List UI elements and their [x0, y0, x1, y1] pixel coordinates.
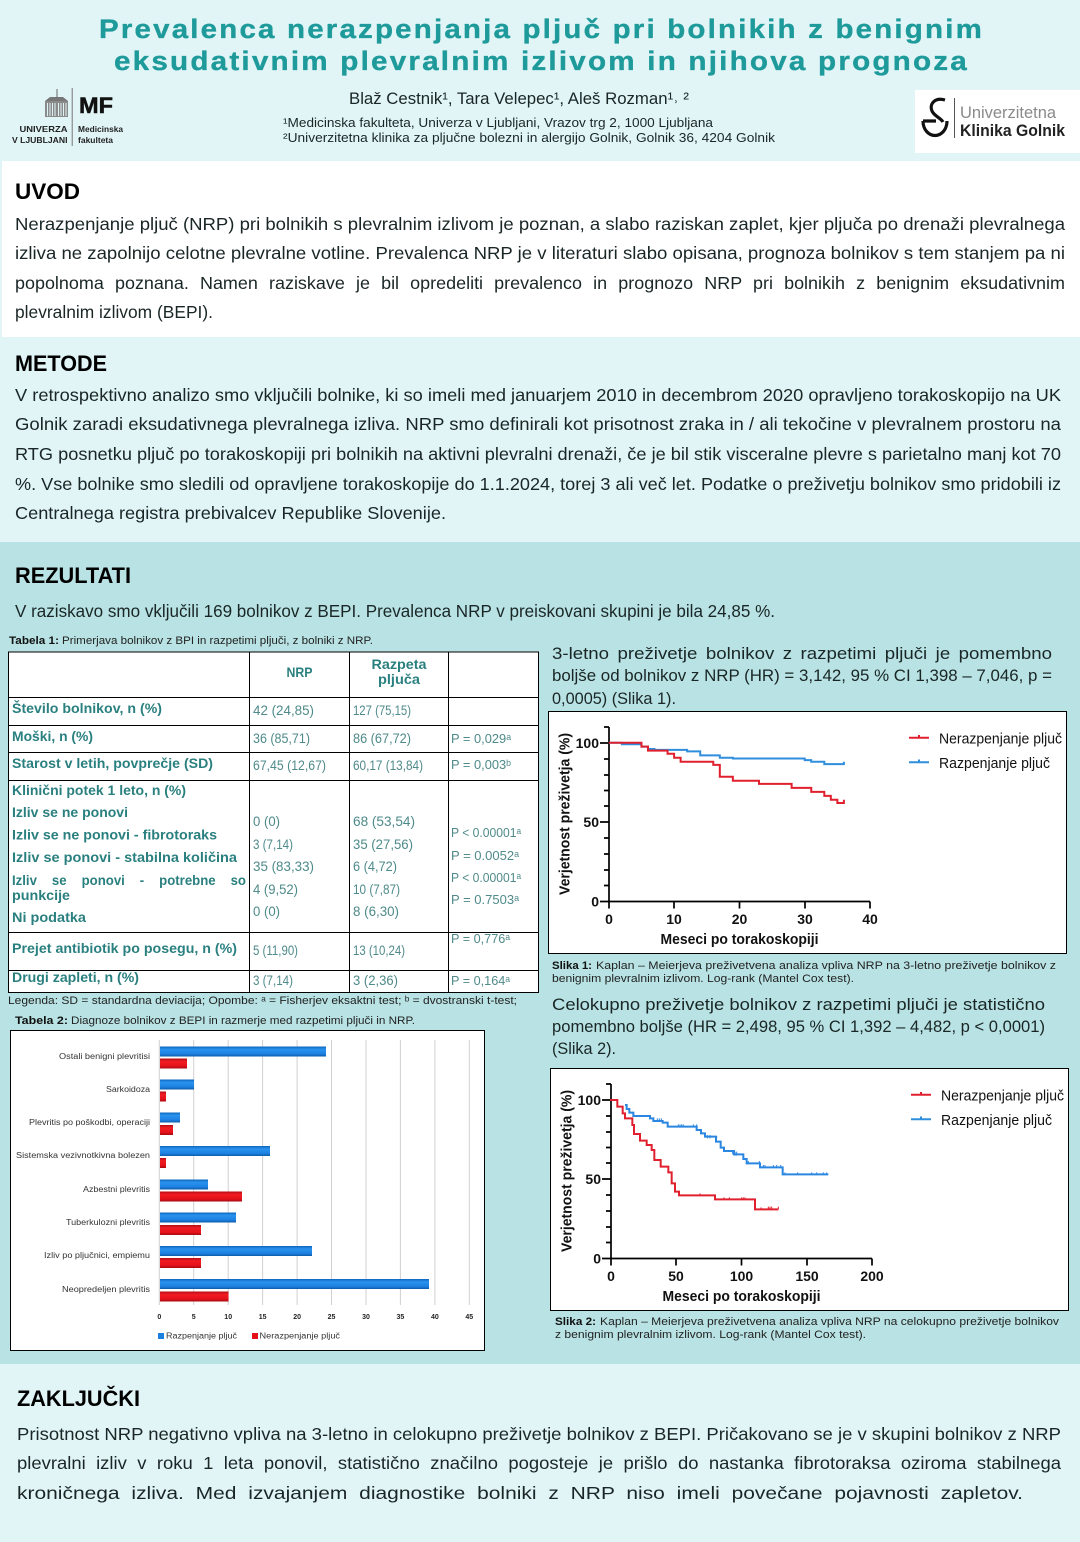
figure 2 caption: Slika 2: [555, 1316, 596, 1328]
figure 2 caption: Kaplan – Meierjeva preživetvena analiza vpliva NRP na celokupno preživetje bolnikov [600, 1316, 1060, 1328]
header band background [0, 0, 1080, 161]
axis numbers: 50 [668, 1268, 684, 1284]
p values: P = 0,029ᵃ [451, 732, 511, 746]
panel: UVOD [2, 161, 1080, 337]
figure 2 caption [555, 1316, 1060, 1341]
category labels: Azbestni plevritis [83, 1185, 150, 1194]
curves [609, 743, 844, 803]
axis numbers: 100 [730, 1268, 753, 1284]
axis numbers: 50 [585, 1171, 601, 1187]
text block: methods: Golnik zaradi eksudativnega plevralnega izliva. NRP smo definirali kot prisotnost zraka in / ali tekočine v plevralnem prostoru na [15, 414, 1061, 434]
logo: University of Ljubljana Faculty of Medicine: MF [79, 93, 113, 118]
razpeta pljuca values: 13 (10,24) [353, 943, 405, 958]
icon: faculty building [45, 89, 68, 117]
NRP values: 0 (0) [253, 904, 280, 919]
heading: REZULTATI: REZULTATI [15, 563, 131, 588]
x axis numbers: 0 [157, 1314, 161, 1321]
axis numbers: 0 [591, 894, 599, 910]
x axis numbers: 30 [362, 1314, 370, 1321]
chart legend: Razpenjanje pljuč [166, 1332, 237, 1340]
razpeta pljuca values: 8 (6,30) [353, 904, 399, 919]
p values: P = 0,776ᵃ [451, 932, 510, 946]
x axis numbers: 40 [431, 1314, 439, 1321]
row labels: Klinični potek 1 leto, n (%) [12, 782, 186, 798]
axis numbers: 100 [578, 1092, 601, 1108]
title [99, 14, 984, 76]
text block: results lead: V raziskavo smo vključili 169 bolnikov z BEPI. Prevalenca NRP v preiskovani skupini je bila 24,85 %. [15, 601, 775, 621]
table header: NRP [286, 664, 312, 680]
x axis numbers: 45 [465, 1314, 473, 1321]
heading: ZAKLJUCKI: ZAKLJUČKI [17, 1386, 140, 1411]
table header: Razpeta [372, 656, 427, 672]
title: Prevalenca nerazpenjanja pljuč pri bolnikih z benignim [99, 14, 984, 44]
x axis numbers [157, 1314, 473, 1321]
text block: methods: RTG posnetku pljuč po torakoskopiji pri bolnikih na aktivni plevralni drenaži, če je bil stik visceralne plevre s parietalno manj kot 70 [15, 444, 1061, 464]
axis numbers: 100 [576, 735, 599, 751]
axis numbers [578, 1092, 884, 1284]
text block: 3-year survival [552, 644, 1052, 708]
row labels: Drugi zapleti, n (%) [12, 969, 139, 985]
razpeta pljuca values: 35 (27,56) [353, 837, 413, 852]
text block: overall survival: Celokupno preživetje bolnikov z razpetimi pljuči je statistično [552, 995, 1045, 1014]
axis numbers [576, 735, 878, 927]
NRP values [253, 703, 326, 988]
p values [451, 732, 521, 988]
axis titles: Verjetnost preživetja (%) [560, 1090, 576, 1252]
chart legend [158, 1332, 340, 1340]
NRP values: 3 (7,14) [253, 973, 293, 988]
category labels: Ostali benigni plevritisi [59, 1052, 150, 1061]
text block: overall survival: (Slika 2). [552, 1039, 616, 1058]
legend: Nerazpenjanje pljuč [939, 730, 1062, 748]
NRP values: 35 (83,33) [253, 859, 314, 874]
row labels: Prejet antibiotik po posegu, n (%) [12, 940, 237, 956]
text block: methods: %. Vse bolnike smo sledili od opravljene torakoskopije do 1.1.2024, torej 3 ali več let. Podatke o preživetju bolnikov smo pridobili iz [15, 474, 1061, 494]
title: eksudativnim plevralnim izlivom in njihova prognoza [114, 46, 969, 76]
table 2 caption: Tabela 2: [15, 1015, 68, 1027]
row labels: Izliv se ne ponovi [12, 804, 128, 820]
razpeta pljuca values: 86 (67,72) [353, 731, 411, 746]
axis titles [558, 733, 818, 948]
text block: introduction [15, 214, 1065, 322]
axis numbers: 0 [607, 1268, 615, 1284]
text block: introduction: popolnoma poznana. Namen raziskave je bil opredeliti prevalenco in prognozo NRP pri bolnikih z benignim eksudativnim [15, 273, 1065, 293]
table header [286, 656, 427, 687]
heading: UVOD: UVOD [15, 179, 80, 204]
panel: METODE [0, 337, 1080, 542]
p values: P < 0.00001ᵃ [451, 826, 521, 840]
text block: methods: V retrospektivno analizo smo vključili bolnike, ki so imeli med januarjem 2010 in decembrom 2020 opravljeno torakoskopijo na UK [15, 385, 1061, 405]
affiliations [283, 115, 776, 145]
p values: P = 0.0052ᵃ [451, 849, 519, 863]
axis numbers: 30 [797, 911, 813, 927]
razpeta pljuca values: 127 (75,15) [353, 703, 411, 718]
logo: University of Ljubljana Faculty of Medicine: Medicinska [78, 125, 124, 134]
NRP values: 0 (0) [253, 814, 280, 829]
axis titles: Verjetnost preživetja (%) [558, 733, 574, 895]
table 1 caption: Primerjava bolnikov z BPI in razpetimi pljuči, z bolniki z NRP. [62, 635, 373, 647]
p values: P = 0,003ᵇ [451, 758, 511, 772]
p values: P = 0,164ᵃ [451, 974, 510, 988]
authors: Blaž Cestnik¹, Tara Velepec¹, Aleš Rozman¹˒ ² [349, 90, 689, 108]
NRP values: 5 (11,90) [253, 943, 298, 958]
row labels: Izliv se ponovi - potrebne so [12, 872, 246, 888]
row labels: Število bolnikov, n (%) [12, 699, 162, 716]
category labels: Sistemska vezivnotkivna bolezen [16, 1151, 150, 1160]
figure 1 caption [552, 960, 1056, 985]
axis numbers: 0 [605, 911, 613, 927]
logo: Univerzitetna Klinika Golnik: Klinika Golnik [960, 122, 1066, 140]
category labels: Izliv po pljučnici, empiemu [44, 1251, 150, 1260]
row labels: Ni podatka [12, 909, 86, 925]
razpeta pljuca values: 60,17 (13,84) [353, 758, 423, 773]
axis numbers: 150 [795, 1268, 819, 1284]
text block: 3-year survival: 0,0005) (Slika 1). [552, 689, 676, 708]
x axis numbers: 25 [328, 1314, 335, 1321]
heading: METODE: METODE [15, 351, 107, 376]
razpeta pljuca values: 3 (2,36) [353, 973, 398, 988]
category labels [16, 1052, 151, 1294]
curves [610, 1100, 828, 1209]
row labels: Starost v letih, povprečje (SD) [12, 755, 213, 771]
razpeta pljuca values: 68 (53,54) [353, 814, 415, 829]
axis titles: Meseci po torakoskopiji [662, 1288, 820, 1305]
x axis numbers: 20 [293, 1314, 301, 1321]
text block: overall survival [552, 995, 1045, 1058]
category labels: Plevritis po poškodbi, operaciji [29, 1118, 150, 1127]
logo: University of Ljubljana Faculty of Medicine: fakulteta [78, 136, 114, 145]
category labels: Sarkoidoza [106, 1085, 151, 1094]
category labels: Tuberkulozni plevritis [66, 1218, 150, 1227]
table header: pljuča [378, 671, 420, 687]
text block: introduction: izliva ne zapolnijo celotne plevralne votline. Prevalenca NRP je v literaturi slabo opisana, prognoza bolnikov s tem stanjem pa ni [15, 243, 1065, 263]
NRP values: 3 (7,14) [253, 837, 293, 852]
axis titles: Meseci po torakoskopiji [660, 931, 818, 948]
axis numbers: 200 [860, 1268, 884, 1284]
text block: conclusions: Prisotnost NRP negativno vpliva na 3-letno in celokupno preživetje bolnikov z BEPI. Pričakovano se je v skupini bolnikov z NRP [17, 1424, 1061, 1444]
axis numbers: 50 [583, 814, 599, 830]
text block: 3-year survival: 3-letno preživetje bolnikov z razpetimi pljuči je pomembno [552, 644, 1052, 663]
text block: 3-year survival: boljše od bolnikov z NRP (HR) = 3,142, 95 % CI 1,398 – 7,046, p = [552, 666, 1052, 685]
x axis numbers: 10 [224, 1314, 232, 1321]
figure 1 caption: Slika 1: [552, 960, 592, 972]
chart: Kaplan-Meier overall survival [550, 1068, 1068, 1310]
x axis numbers: 35 [397, 1314, 404, 1321]
razpeta pljuca values: 6 (4,72) [353, 859, 397, 874]
panel: REZULTATI background [0, 542, 1080, 1364]
figure 1 caption: Kaplan – Meierjeva preživetvena analiza vpliva NRP na 3-letno preživetje bolnikov z [596, 960, 1056, 972]
p values: P < 0.00001ᵃ [451, 871, 521, 885]
text block: overall survival: pomembno boljše (HR = 2,498, 95 % CI 1,392 – 4,482, p < 0,0001) [552, 1017, 1045, 1036]
p values: P = 0.7503ᵃ [451, 893, 519, 907]
affiliations: ²Univerzitetna klinika za pljučne bolezni in alergijo Golnik, Golnik 36, 4204 Golnik [283, 130, 776, 145]
axis numbers: 10 [666, 911, 682, 927]
axes [600, 727, 870, 908]
affiliations: ¹Medicinska fakulteta, Univerza v Ljubljani, Vrazov trg 2, 1000 Ljubljana [283, 115, 714, 130]
text block: introduction: Nerazpenjanje pljuč (NRP) pri bolnikih s plevralnim izlivom je poznan, a slabo raziskan zaplet, kjer pljuča po drenaži plevralnega [15, 214, 1065, 234]
text block: conclusions: kroničnega izliva. Med izvajanjem diagnostike bolniki z NRP niso imeli povečane pojavnosti zapletov. [17, 1483, 1023, 1503]
figure 2 caption: z benignim plevralnim izlivom. Log-rank (Mantel Cox test). [555, 1329, 866, 1341]
legend: Razpenjanje pljuč [941, 1112, 1052, 1129]
logo: Univerzitetna Klinika Golnik: Univerzitetna [960, 103, 1057, 122]
row labels: Izliv se ponovi - stabilna količina [12, 849, 237, 865]
axis numbers: 0 [593, 1250, 601, 1266]
red bars: nerazpenjanje pljuc [160, 1058, 242, 1302]
logo: Univerzitetna Klinika Golnik [915, 90, 1080, 153]
text block: conclusions: plevralni izliv v roku 1 leta ponovil, statistično značilno pogosteje je prišlo do nastanka fibrotoraksa oziroma stabilnega [17, 1453, 1061, 1473]
legend: Razpenjanje pljuč [939, 755, 1050, 772]
NRP values: 36 (85,71) [253, 731, 310, 746]
text block: conclusions [17, 1424, 1061, 1503]
category labels: Neopredeljen plevritis [62, 1285, 150, 1294]
legend [911, 1088, 1064, 1129]
panel: ZAKLJUCKI [0, 1364, 1080, 1542]
logo: University of Ljubljana Faculty of Medicine: UNIVERZA [20, 124, 68, 134]
table legend: Legenda: SD = standardna deviacija; Opombe: ᵃ = Fisherjev eksaktni test; ᵇ = dvostranski t-test; [8, 995, 517, 1007]
blue bars: razpenjanje pljuc [160, 1046, 429, 1289]
razpeta pljuca values [353, 703, 423, 988]
x axis numbers: 15 [259, 1314, 267, 1321]
x axis numbers: 5 [192, 1314, 196, 1321]
NRP values: 67,45 (12,67) [253, 758, 326, 773]
text block: introduction: plevralnim izlivom (BEPI). [15, 302, 213, 322]
NRP values: 42 (24,85) [253, 703, 314, 718]
legend [909, 730, 1062, 772]
axis numbers: 40 [862, 911, 878, 927]
text block: methods [15, 385, 1061, 523]
legend: Nerazpenjanje pljuč [941, 1088, 1064, 1104]
axes [602, 1084, 872, 1266]
logo: University of Ljubljana Faculty of Medicine: V LJUBLJANI [12, 135, 68, 145]
table 1 [8, 652, 539, 992]
bar chart: diagnoses [10, 1030, 484, 1350]
table 1 caption: Tabela 1: [9, 635, 59, 647]
figure 1 caption: benignim plevralnim izlivom. Log-rank (Mantel Cox test). [552, 973, 854, 985]
NRP values: 4 (9,52) [253, 882, 298, 897]
axis numbers: 20 [732, 911, 747, 927]
row labels: Moški, n (%) [12, 728, 93, 744]
logo: University of Ljubljana Faculty of Medicine [12, 88, 124, 146]
row labels [12, 699, 246, 985]
chart legend: Nerazpenjanje pljuč [260, 1332, 340, 1340]
chart: Kaplan-Meier 3-year survival [548, 712, 1066, 954]
axis titles [560, 1090, 820, 1305]
row labels: punkcije [12, 887, 70, 903]
table 2 caption: Diagnoze bolnikov z BEPI in razmerje med razpetimi pljuči in NRP. [71, 1015, 415, 1027]
text block: methods: Centralnega registra prebivalcev Republike Slovenije. [15, 503, 446, 523]
row labels: Izliv se ne ponovi - fibrotoraks [12, 826, 217, 842]
razpeta pljuca values: 10 (7,87) [353, 882, 400, 897]
